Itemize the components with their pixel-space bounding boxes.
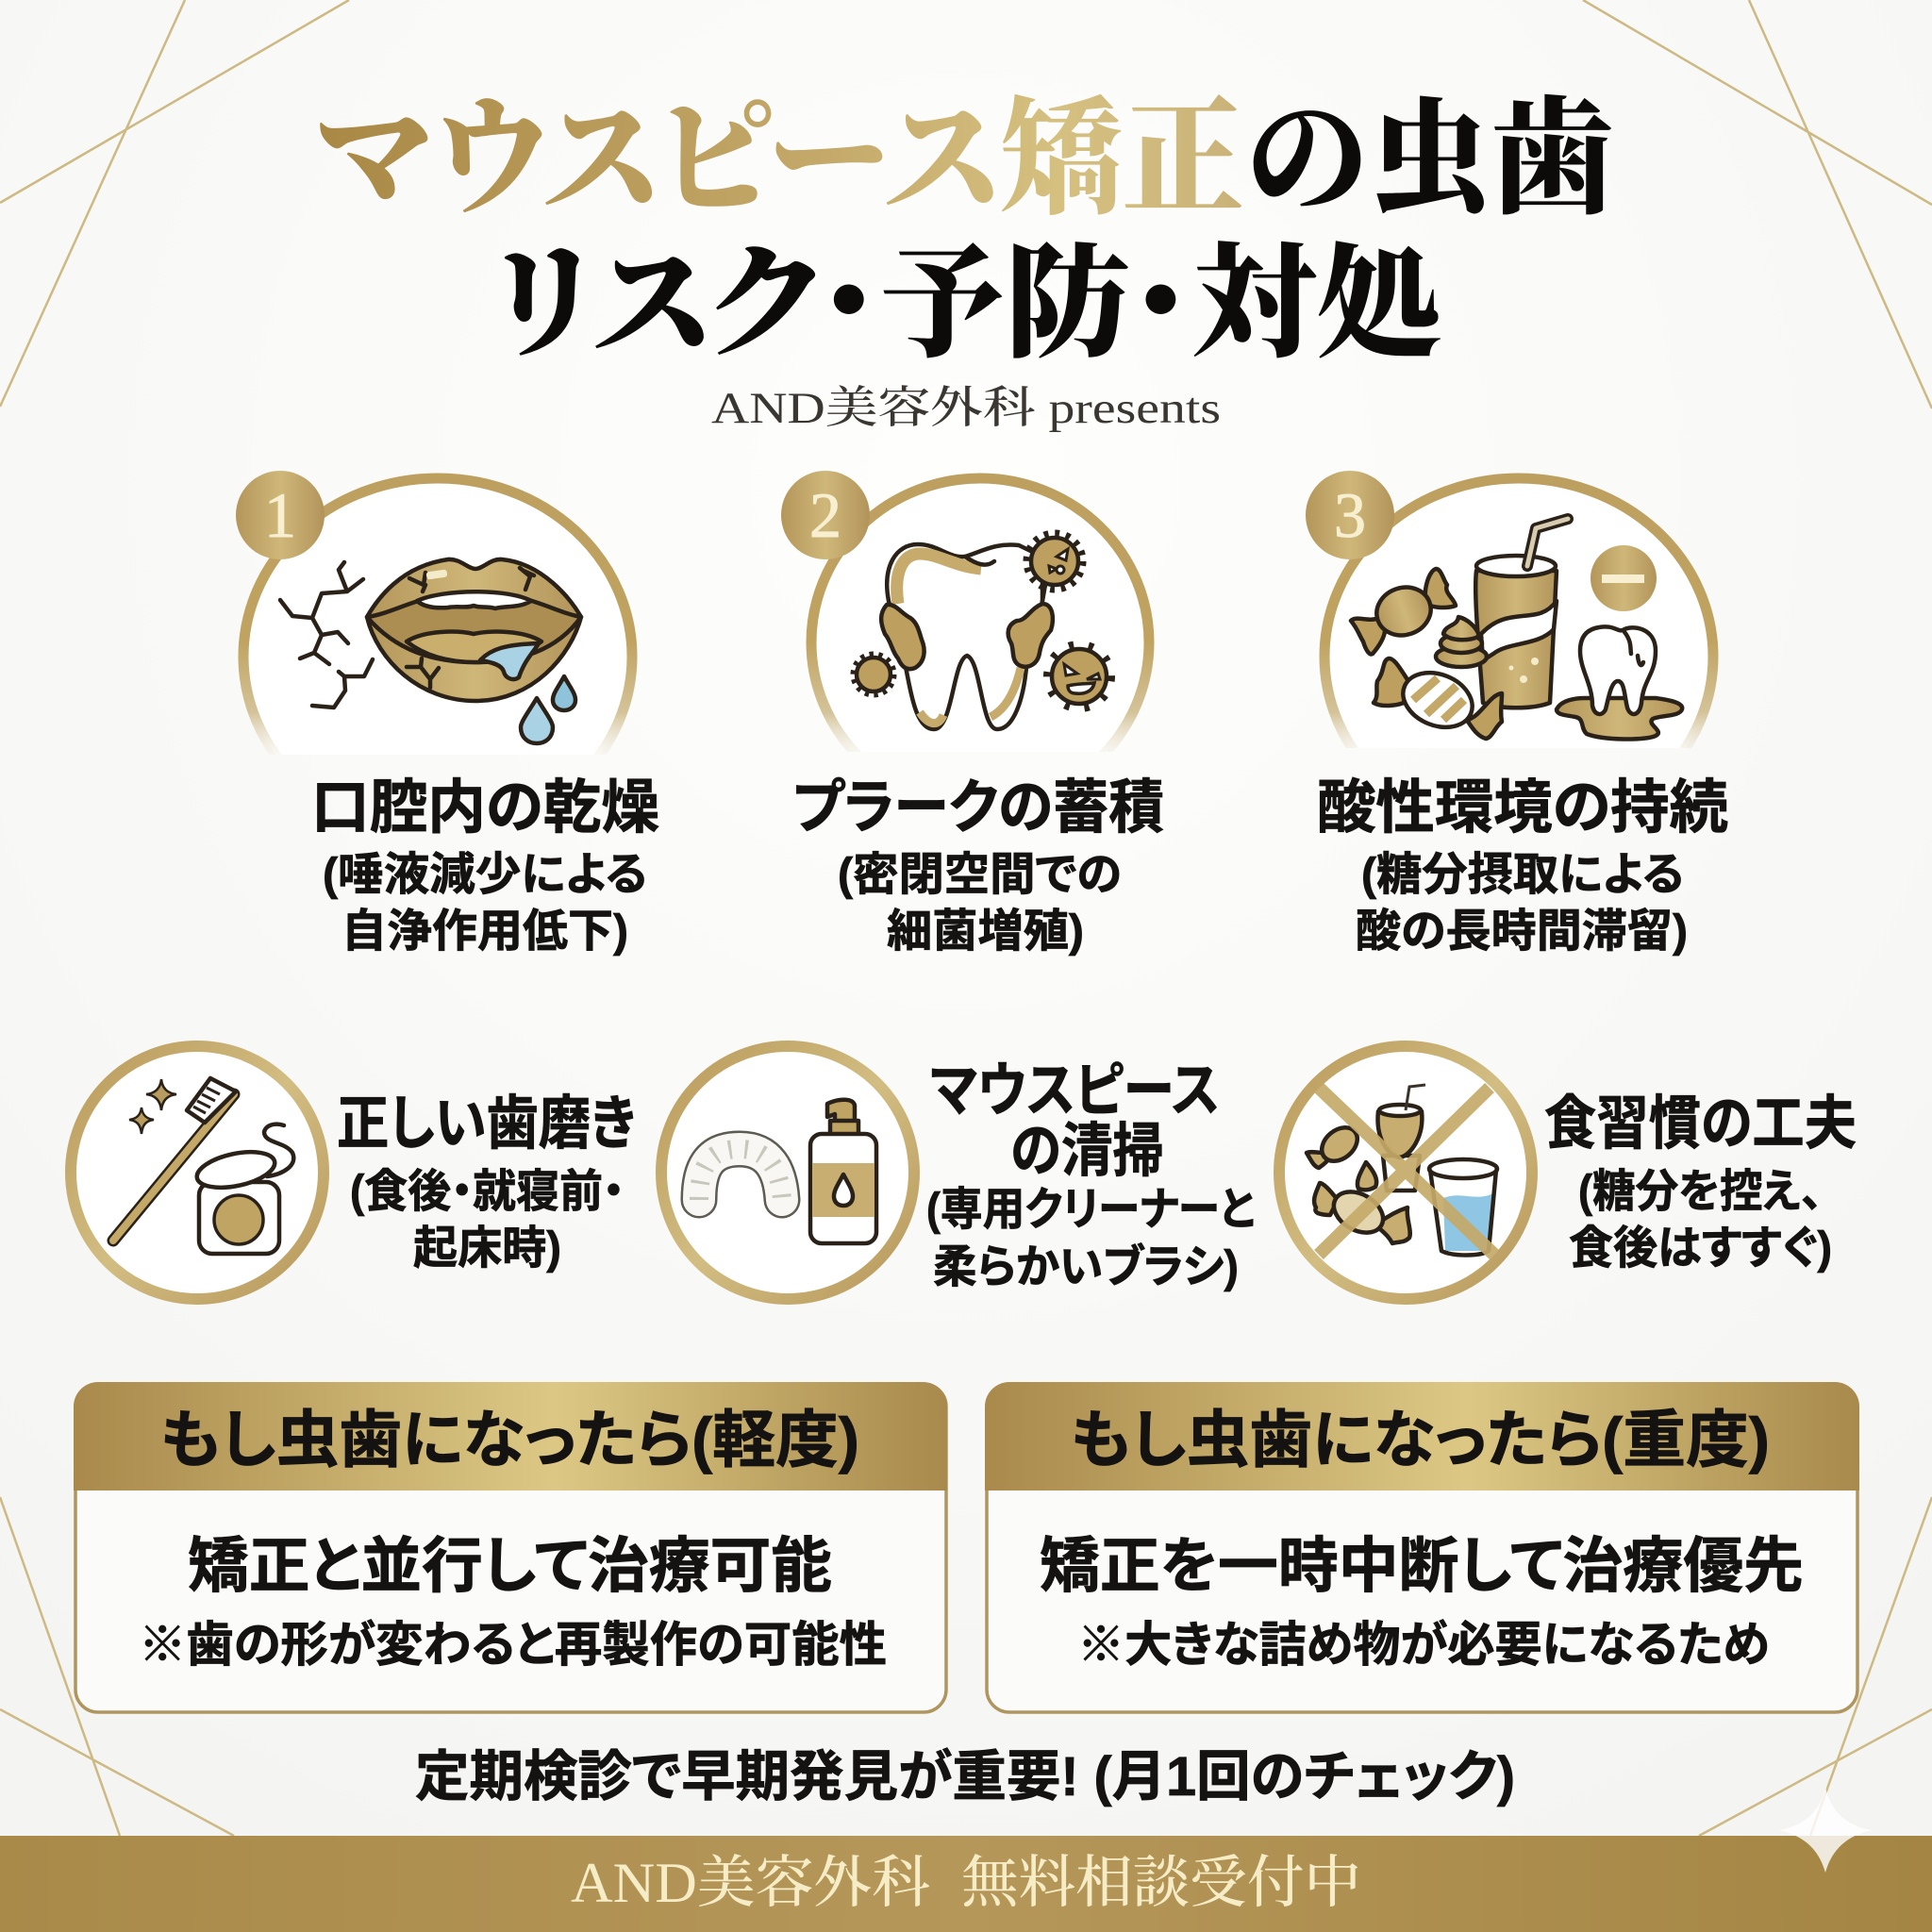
sub-label 1 (323, 850, 647, 957)
panel: mild cavity (74, 1382, 947, 1712)
text A: 正しい歯磨き (337, 1091, 636, 1157)
text B: マウスピース (930, 1058, 1220, 1124)
panel: severe cavity (985, 1382, 1859, 1712)
header text left: もし虫歯になったら(軽度) (160, 1405, 859, 1474)
icon: crossed sweets and water glass (1307, 1085, 1497, 1255)
badge 3 (1306, 471, 1394, 559)
footer text (571, 1852, 1361, 1914)
title (314, 91, 1614, 374)
badge 2: 2 (809, 479, 841, 551)
risk 2: plaque (781, 471, 1164, 957)
text A (337, 1091, 636, 1274)
badge 3: 3 (1334, 479, 1366, 551)
sub-label 3 (1356, 850, 1688, 957)
panel body right (987, 1384, 1857, 1712)
panel header left (74, 1382, 947, 1491)
risk 3: acidic environment (1306, 471, 1728, 957)
footer bar (0, 1836, 1932, 1932)
footer text: AND美容外科 (571, 1852, 930, 1914)
text B: 柔らかいブラシ) (933, 1242, 1239, 1292)
text B (926, 1058, 1255, 1292)
icon: aligner and cleaner bottle (699, 1100, 876, 1243)
footer text: 無料相談受付中 (961, 1852, 1361, 1914)
sub-label 2: (密閉空間での (838, 850, 1122, 900)
circle B (661, 1046, 914, 1299)
ring 1 (238, 474, 638, 755)
circle A (71, 1046, 324, 1299)
regular checkup message: 定期検診で早期発見が重要! (月1回のチェック) (415, 1746, 1515, 1807)
sub-label 3: (糖分摂取による (1361, 850, 1684, 900)
sub-label 1: (唾液減少による (323, 850, 647, 900)
icon: toothbrush and floss (113, 1078, 293, 1254)
note right: ※大きな詰め物が必要になるため (1077, 1618, 1770, 1672)
badge 1 (236, 471, 325, 559)
prevention 3: diet habits (1279, 1046, 1857, 1299)
text A: 起床時) (413, 1224, 561, 1274)
panel header right (985, 1382, 1859, 1491)
note left: ※歯の形が変わると再製作の可能性 (139, 1618, 887, 1672)
sub-label 1: 自浄作用低下) (341, 907, 628, 957)
title: リスク・予防・対処 (492, 237, 1441, 374)
panel body left (75, 1384, 946, 1712)
text A: (食後・就寝前・ (350, 1167, 625, 1217)
label 2: プラークの蓄積 (792, 775, 1164, 841)
icon: sparkle (1779, 1787, 1872, 1873)
text C: 食後はすすぐ) (1569, 1224, 1832, 1274)
label 1: 口腔内の乾燥 (311, 775, 659, 841)
subtitle: AND美容外科 presents (711, 384, 1221, 433)
sub-label 2 (838, 850, 1122, 957)
icon: cracked lips (280, 559, 581, 743)
sub-label 2: 細菌増殖) (887, 907, 1084, 957)
circle C (1279, 1046, 1532, 1299)
main text right: 矯正を一時中断して治療優先 (1040, 1532, 1804, 1600)
text C (1544, 1091, 1857, 1274)
prevention 1: brushing (71, 1046, 636, 1299)
risk 1: oral dryness (236, 471, 659, 957)
text C: (糖分を控え、 (1578, 1167, 1823, 1217)
header text right: もし虫歯になったら(重度) (1071, 1405, 1770, 1474)
icon: sweets, soda and tooth (1351, 519, 1682, 740)
prevention 2: mouthpiece cleaning (661, 1046, 1255, 1299)
main text left: 矯正と並行して治療可能 (188, 1532, 832, 1600)
text C: 食習慣の工夫 (1544, 1091, 1857, 1157)
text B: (専用クリーナーと (926, 1185, 1255, 1235)
badge 1: 1 (264, 479, 296, 551)
sub-label 3: 酸の長時間滞留) (1356, 907, 1688, 957)
badge 2 (781, 471, 870, 559)
label 3: 酸性環境の持続 (1317, 775, 1728, 841)
ring 2 (806, 474, 1155, 752)
text B: の清掃 (1010, 1119, 1164, 1184)
ring 3 (1319, 474, 1719, 748)
icon: tooth with plaque (855, 535, 1109, 729)
title: マウスピース矯正の虫歯 (314, 91, 1614, 231)
